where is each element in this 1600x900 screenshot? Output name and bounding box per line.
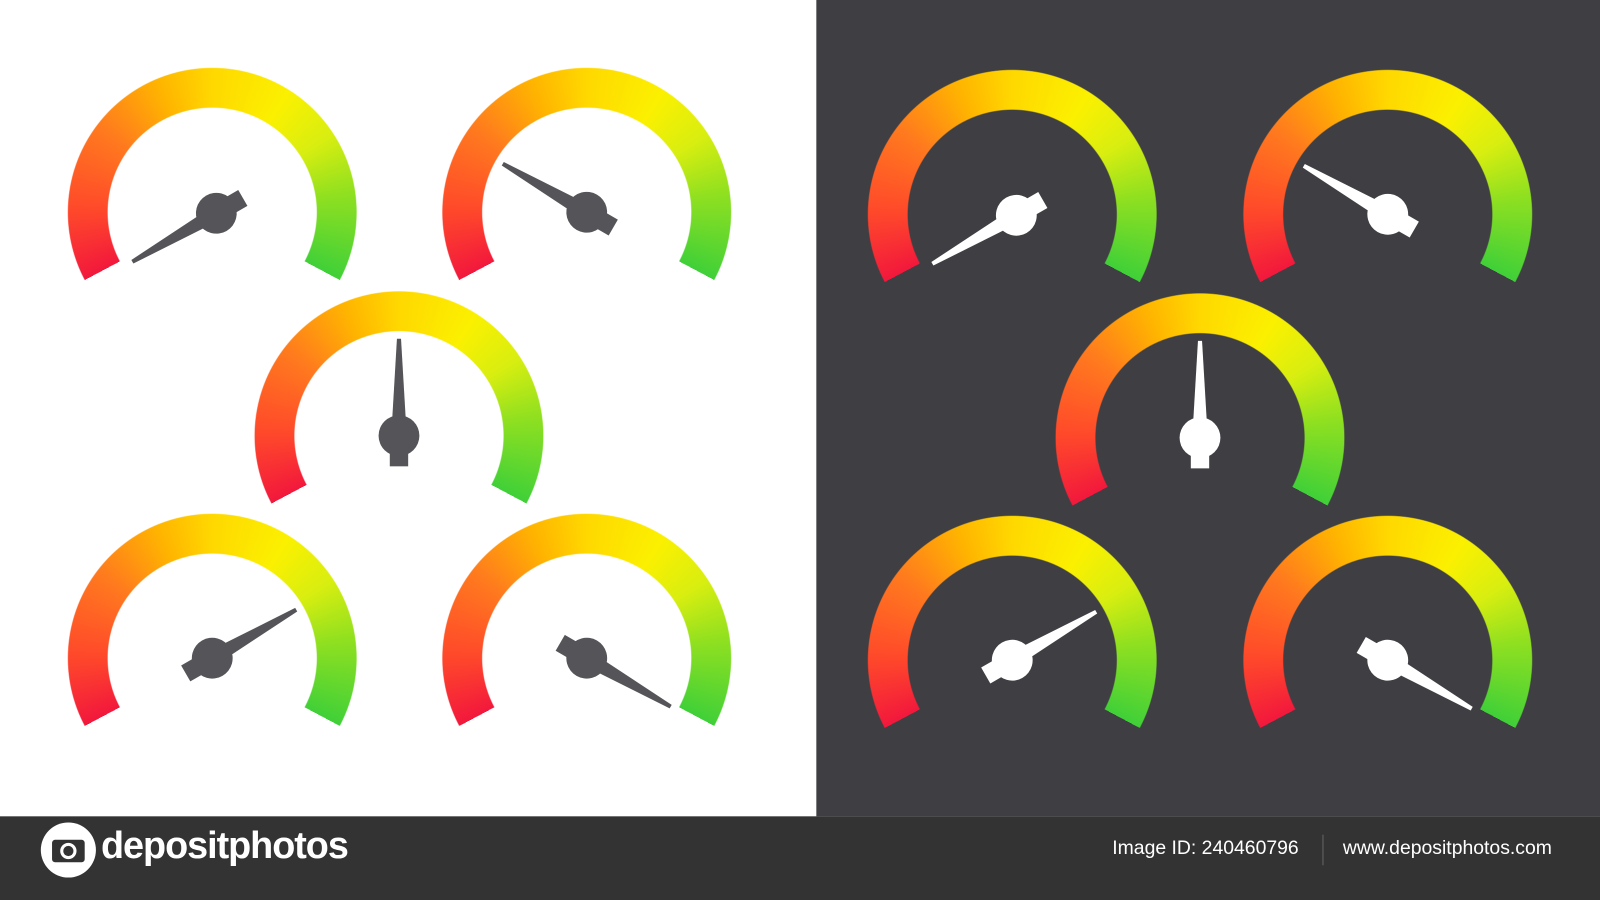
image id: Image ID: 240460796 bbox=[1112, 838, 1299, 859]
logo text: depositphotos bbox=[101, 824, 348, 866]
gauge 4 light bbox=[68, 514, 357, 726]
panel: dark background bbox=[816, 0, 1600, 816]
gauge 1 dark bbox=[868, 70, 1157, 282]
website: www.depositphotos.com bbox=[1343, 838, 1552, 859]
gauge 4 dark bbox=[868, 516, 1157, 728]
gauge 1 light bbox=[68, 68, 357, 280]
gauge 5 dark bbox=[1243, 516, 1532, 728]
gauge 5 light bbox=[442, 514, 732, 726]
gauge 2 dark bbox=[1243, 70, 1532, 282]
gauge 3 light bbox=[254, 291, 544, 504]
gauge 3 dark bbox=[1055, 293, 1345, 506]
footer bar bbox=[0, 816, 1600, 900]
gauge 2 light bbox=[442, 68, 732, 280]
icon: camera logo bbox=[40, 822, 96, 878]
panel: light background bbox=[0, 0, 816, 816]
